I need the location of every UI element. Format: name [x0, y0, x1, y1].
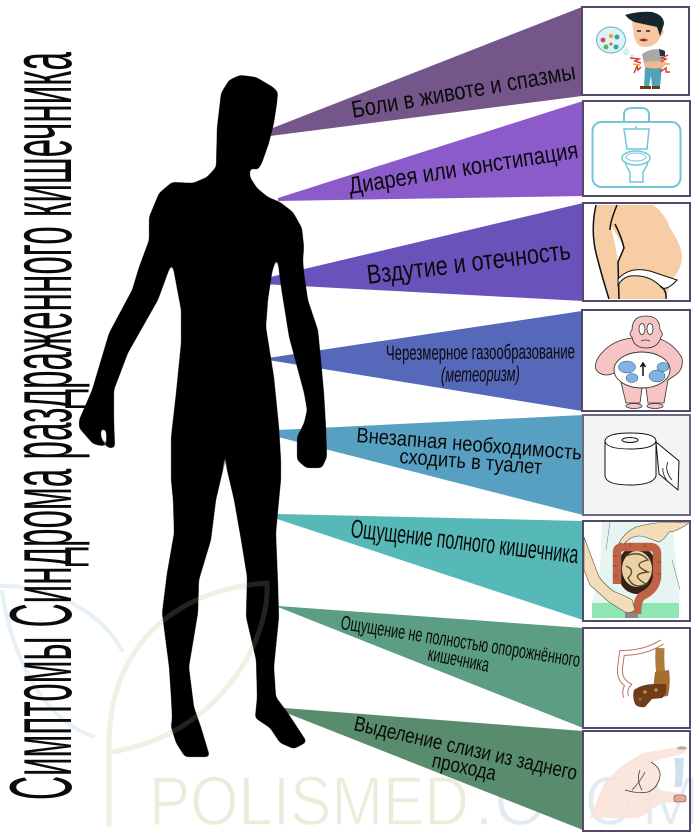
picture: hand with mucus [583, 731, 700, 839]
picture: toilet in a bag [583, 101, 690, 196]
label: abdominal pain: Боли в животе и спазмы [349, 58, 578, 124]
wedge: mucus discharge [284, 708, 583, 830]
picture: colon with hands [583, 521, 690, 621]
human silhouette [79, 75, 327, 757]
picture: toilet paper roll [583, 415, 690, 515]
label: diarrhea or constipation: Диарея или констипация [347, 137, 580, 200]
picture: hand with mucus: O [585, 762, 634, 839]
wedge: sudden urge [278, 415, 583, 515]
label: excessive gas: (метеоризм) [441, 363, 520, 387]
label: excessive gas: Черезмерное газообразование [386, 340, 575, 365]
picture: cartoon man with gas [582, 310, 690, 411]
label: incomplete emptying [339, 612, 582, 677]
wedge: bloating [262, 203, 583, 301]
label: sudden urge: Внезапная необходимость [356, 424, 583, 465]
label: sudden urge: сходить в туалет [399, 445, 543, 479]
wedge: excessive gas [268, 311, 582, 411]
watermark: POLISMED.COM logo: POLISMED [149, 762, 469, 839]
wedge: diarrhea or constipation [278, 101, 583, 201]
wedge: feeling of full bowel [277, 514, 583, 620]
watermark: POLISMED.COM logo [0, 583, 544, 839]
watermark: POLISMED.COM logo: C [494, 762, 544, 839]
label: mucus discharge: прохода [430, 749, 499, 785]
label: mucus discharge: Выделение слизи из заднего [352, 712, 579, 785]
picture: hand with mucus: M [641, 762, 700, 839]
wedge: incomplete emptying [278, 606, 583, 728]
picture: impacted colon [583, 628, 690, 728]
watermark: POLISMED.COM logo: . [474, 762, 494, 839]
picture: man with stomach ache [582, 7, 689, 95]
wedge: abdominal pain [270, 7, 582, 136]
label: bloating: Вздутие и отечность [365, 235, 572, 290]
picture: bloated belly [583, 203, 690, 301]
label: incomplete emptying: кишечника [426, 643, 492, 677]
label: excessive gas [386, 340, 575, 387]
